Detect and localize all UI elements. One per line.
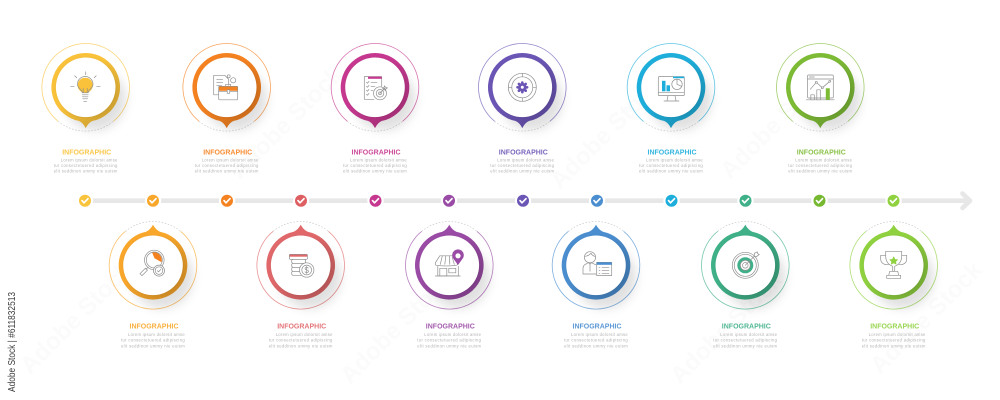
step 12: trophy — [850, 222, 938, 348]
timeline arrow — [85, 194, 970, 208]
icon: checklist with target — [364, 77, 388, 100]
body text: Lorem ipsum dolorsit amse — [276, 332, 333, 337]
body text: Lorem ipsum dolorsit amse — [424, 332, 482, 337]
body text: tur consectetuered adipiscing — [788, 163, 853, 168]
stock credit: Adobe Stock | #611832513 — [6, 292, 18, 392]
body text: tur consectetuered adipiscing — [121, 338, 185, 343]
body text: tur consectetuered adipiscing — [269, 338, 333, 343]
step 9: shop location — [406, 222, 493, 348]
heading: INFOGRAPHIC — [62, 147, 112, 156]
watermark: Adobe Stock — [545, 71, 668, 194]
step 10: person — [552, 222, 640, 348]
body text: Lorem ipsum dolorsit amse — [61, 157, 118, 162]
heading: INFOGRAPHIC — [797, 147, 846, 156]
body text: Lorem ipsum dolorsit amse — [795, 157, 853, 162]
body text: tur consectetuered adipiscing — [417, 338, 482, 343]
body text: tur consectetuered adipiscing — [490, 163, 555, 168]
body text: elit seddinon ummy nie euism — [54, 169, 118, 174]
heading: INFOGRAPHIC — [203, 147, 253, 156]
icon: businessman with list card — [583, 252, 612, 276]
step 3: checklist — [331, 43, 419, 174]
watermark: Adobe Stock — [865, 256, 988, 379]
body text: Lorem ipsum dolorsit amse — [720, 332, 778, 337]
heading: INFOGRAPHIC — [572, 321, 622, 330]
step 4: gear — [478, 43, 566, 174]
body text: tur consectetuered adipiscing — [343, 163, 407, 168]
watermark: Adobe Stock — [15, 256, 138, 379]
body text: elit seddinon ummy nie euism — [490, 169, 554, 174]
step 2: briefcase — [183, 43, 270, 174]
body text: tur consectetuered adipiscing — [713, 338, 778, 343]
body text: elit seddinon ummy nie euism — [343, 169, 407, 174]
icon: briefcase with document — [214, 75, 238, 100]
watermark: Adobe Stock — [665, 266, 788, 389]
icon: magnifying glass with check — [140, 250, 164, 276]
body text: tur consectetuered adipiscing — [54, 163, 118, 168]
heading: INFOGRAPHIC — [426, 321, 475, 330]
icon: gear with circular arrows — [508, 73, 536, 101]
body text: elit seddinon ummy nie euism — [713, 343, 777, 348]
heading: INFOGRAPHIC — [648, 147, 697, 156]
body text: Lorem ipsum dolorsit amse — [646, 157, 703, 162]
icon: monitor with charts — [658, 77, 684, 101]
body text: tur consectetuered adipiscing — [639, 163, 703, 168]
watermark: Adobe Stock — [225, 61, 348, 184]
body text: Lorem ipsum dolorsit amse — [869, 332, 926, 337]
body text: tur consectetuered adipiscing — [862, 338, 926, 343]
body text: elit seddinon ummy nie euism — [417, 343, 481, 348]
body text: elit seddinon ummy nie euism — [195, 169, 259, 174]
step 11: target — [702, 222, 789, 348]
body text: Lorem ipsum dolorsit amse — [350, 157, 407, 162]
icon: shop with map pin — [435, 249, 464, 276]
icon: browser window with growth chart — [806, 75, 834, 100]
heading: INFOGRAPHIC — [277, 321, 327, 330]
body text: elit seddinon ummy nie euism — [788, 169, 852, 174]
watermark: Adobe Stock — [335, 266, 458, 389]
timeline checkpoints — [77, 192, 902, 209]
body text: elit seddinon ummy nie euism — [564, 343, 628, 348]
body text: elit seddinon ummy nie euism — [269, 343, 333, 348]
heading: INFOGRAPHIC — [352, 147, 401, 156]
heading: INFOGRAPHIC — [870, 321, 920, 330]
watermark: Adobe Stock — [715, 61, 838, 184]
heading: INFOGRAPHIC — [499, 147, 548, 156]
body text: elit seddinon ummy nie euism — [862, 343, 926, 348]
body text: Lorem ipsum dolorsit amse — [497, 157, 555, 162]
step 1: idea — [42, 43, 130, 174]
body text: elit seddinon ummy nie euism — [639, 169, 703, 174]
watermark — [15, 61, 988, 389]
icon: target with arrow — [732, 252, 759, 278]
body text: Lorem ipsum dolorsit amse — [571, 332, 628, 337]
step 6: browser chart — [776, 43, 864, 174]
body text: tur consectetuered adipiscing — [195, 163, 259, 168]
step 5: monitor — [627, 43, 715, 174]
body text: Lorem ipsum dolorsit amse — [128, 332, 185, 337]
body text: elit seddinon ummy nie euism — [121, 343, 185, 348]
body text: tur consectetuered adipiscing — [564, 338, 628, 343]
icon: coin stack with dollar — [289, 254, 314, 277]
body text: Lorem ipsum dolorsit amse — [202, 157, 259, 162]
heading: INFOGRAPHIC — [722, 321, 771, 330]
icon: trophy with star — [881, 251, 907, 278]
icon: light bulb — [71, 72, 100, 101]
step 8: coins — [257, 222, 344, 348]
heading: INFOGRAPHIC — [130, 321, 179, 330]
step 7: magnifier — [109, 222, 197, 348]
